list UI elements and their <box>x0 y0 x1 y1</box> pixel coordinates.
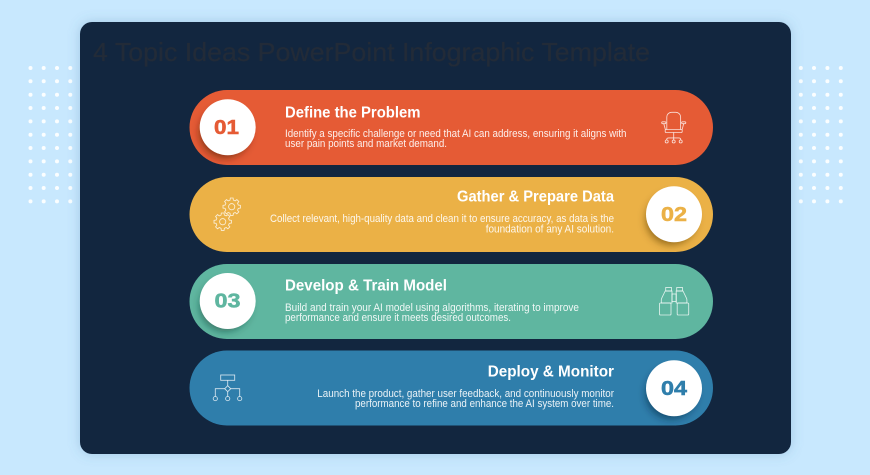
description <box>270 213 614 235</box>
description <box>285 128 626 150</box>
heading: Gather & Prepare Data <box>457 189 614 206</box>
heading: Develop & Train Model <box>285 278 447 295</box>
description: performance to refine and enhance the AI system over time. <box>355 398 614 410</box>
title: 4 Topic Ideas PowerPoint Infographic Template <box>93 37 650 67</box>
panel: step 02 Gather & Prepare Data <box>190 177 713 252</box>
icon: flowchart <box>213 375 242 401</box>
icon: gears <box>214 198 240 230</box>
badge 03 <box>200 273 256 332</box>
description: Build and train your AI model using algorithms, iterating to improve <box>285 302 579 314</box>
description: Collect relevant, high-quality data and clean it to ensure accuracy, as data is the <box>270 213 614 225</box>
panel: dark background card <box>80 22 791 454</box>
description: Identify a specific challenge or need that AI can address, ensuring it aligns with <box>285 128 626 140</box>
panel: step 03 Develop & Train Model <box>190 264 713 339</box>
icon: office chair <box>662 112 686 143</box>
heading: Define the Problem <box>285 104 420 122</box>
badge 01 <box>200 99 256 158</box>
description: user pain points and market demand. <box>285 138 447 150</box>
description <box>285 302 579 324</box>
badge 04: 04 <box>661 377 688 400</box>
description: foundation of any AI solution. <box>486 223 614 235</box>
dot grid left <box>28 66 72 203</box>
badge 04 <box>646 360 702 419</box>
dot grid right <box>799 66 843 203</box>
panel: step 01 Define the Problem <box>190 90 713 165</box>
icon: binoculars <box>660 288 689 315</box>
description <box>317 388 614 410</box>
badge 01: 01 <box>214 116 239 139</box>
description: Launch the product, gather user feedback, and continuously monitor <box>317 388 614 400</box>
badge 02: 02 <box>661 203 687 226</box>
badge 02 <box>646 186 702 245</box>
description: performance and ensure it meets desired outcomes. <box>285 312 511 324</box>
badge 03: 03 <box>214 290 240 313</box>
heading: Deploy & Monitor <box>488 364 614 381</box>
panel: step 04 Deploy & Monitor <box>190 350 713 426</box>
